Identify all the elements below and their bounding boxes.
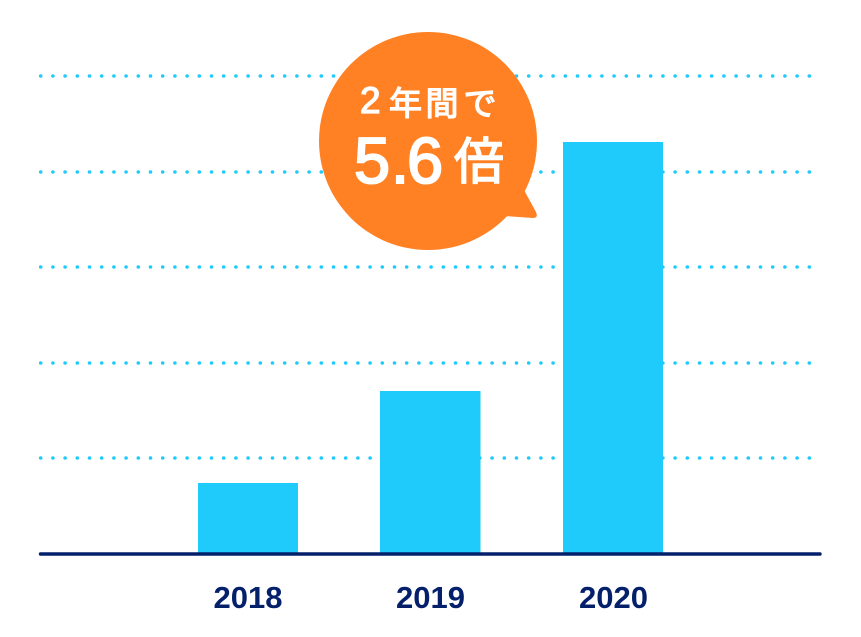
callout text: 2年間で: 年間で (389, 77, 496, 125)
label: 2019: 2019 (396, 580, 465, 615)
x axis (40, 552, 820, 556)
callout text: 5.6倍: 5.6 (354, 124, 443, 197)
callout text: 5.6倍 (354, 122, 504, 197)
callout (319, 32, 537, 250)
callout text: 2年間で: 2 (360, 80, 381, 121)
bar: 2019 (380, 391, 480, 555)
callout text: 5.6倍: 倍 (454, 122, 504, 194)
bar: 2020 (563, 142, 663, 555)
label: 2018: 2018 (214, 580, 282, 615)
label: 2020: 2020 (579, 580, 648, 615)
bar: 2018 (198, 483, 298, 555)
